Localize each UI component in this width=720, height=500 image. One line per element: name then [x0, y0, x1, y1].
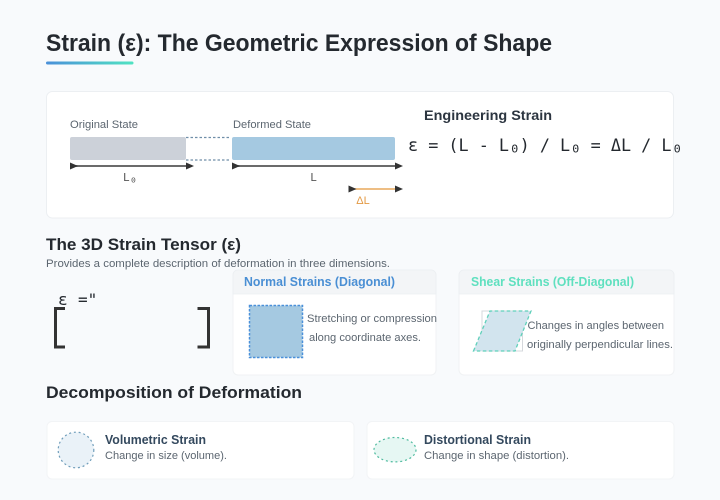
formula: ₀ — [570, 136, 581, 158]
formula: ε = (L - L — [408, 135, 509, 155]
label: deformed state: Deformed State — [233, 119, 311, 131]
tensor matrix — [56, 290, 208, 347]
text: volumetric strain: Change in size (volume). — [105, 450, 227, 462]
text: volumetric strain — [105, 433, 227, 462]
icon: dashed circle — [58, 432, 94, 468]
text: normal strains description: along coordinate axes. — [309, 332, 421, 344]
bar: deformed state — [232, 137, 395, 160]
text: distortional strain: Distortional Strain — [424, 433, 531, 447]
text: volumetric strain: Volumetric Strain — [105, 433, 206, 447]
icon: dashed ellipse — [374, 438, 416, 462]
formula: = ΔL / L — [581, 135, 671, 155]
text: normal strains description — [307, 313, 437, 344]
arrow: delta L — [348, 186, 403, 192]
bar: elongation outline — [186, 138, 231, 160]
panel: normal strains — [233, 270, 437, 375]
arrow: L0 — [70, 162, 194, 170]
text: distortional strain — [424, 433, 569, 462]
panel: engineering strain — [46, 92, 683, 218]
tensor matrix: =" — [78, 290, 97, 309]
text: normal strains description: Stretching or compression — [307, 313, 437, 325]
tensor matrix: ε — [58, 290, 68, 309]
icon: sheared square — [474, 311, 531, 351]
heading: normal strains: Normal Strains (Diagonal) — [244, 275, 395, 289]
label: delta L: ΔL — [356, 195, 370, 207]
panel: volumetric strain — [47, 422, 354, 479]
label: original state: Original State — [70, 119, 138, 131]
icon: stretched square — [250, 306, 302, 358]
formula: ₀ — [672, 136, 683, 158]
formula: ) / L — [520, 135, 570, 155]
text: distortional strain: Change in shape (distortion). — [424, 450, 569, 462]
heading: decomposition: Decomposition of Deformation — [46, 383, 302, 402]
heading: engineering strain: Engineering Strain — [424, 107, 552, 123]
label: L0: L — [123, 171, 130, 184]
text: shear strains description: Changes in angles between — [528, 320, 664, 332]
arrow: L — [232, 162, 403, 170]
panel: distortional strain — [367, 422, 674, 479]
bar: original state — [70, 137, 186, 160]
panel: shear strains — [459, 270, 674, 375]
text: shear strains description: originally perpendicular lines. — [527, 339, 673, 351]
text: shear strains description — [527, 320, 673, 351]
heading: shear strains: Shear Strains (Off-Diagonal) — [471, 275, 634, 289]
title: Strain (ε): The Geometric Expression of Shape — [46, 30, 552, 57]
text: tensor description: Provides a complete description of deformation in three dimensions. — [46, 258, 390, 270]
label: L: L — [310, 171, 317, 184]
label: L0: ₀ — [130, 172, 137, 186]
formula: ₀ — [509, 136, 520, 158]
heading: 3D strain tensor: The 3D Strain Tensor (ε) — [46, 235, 241, 254]
